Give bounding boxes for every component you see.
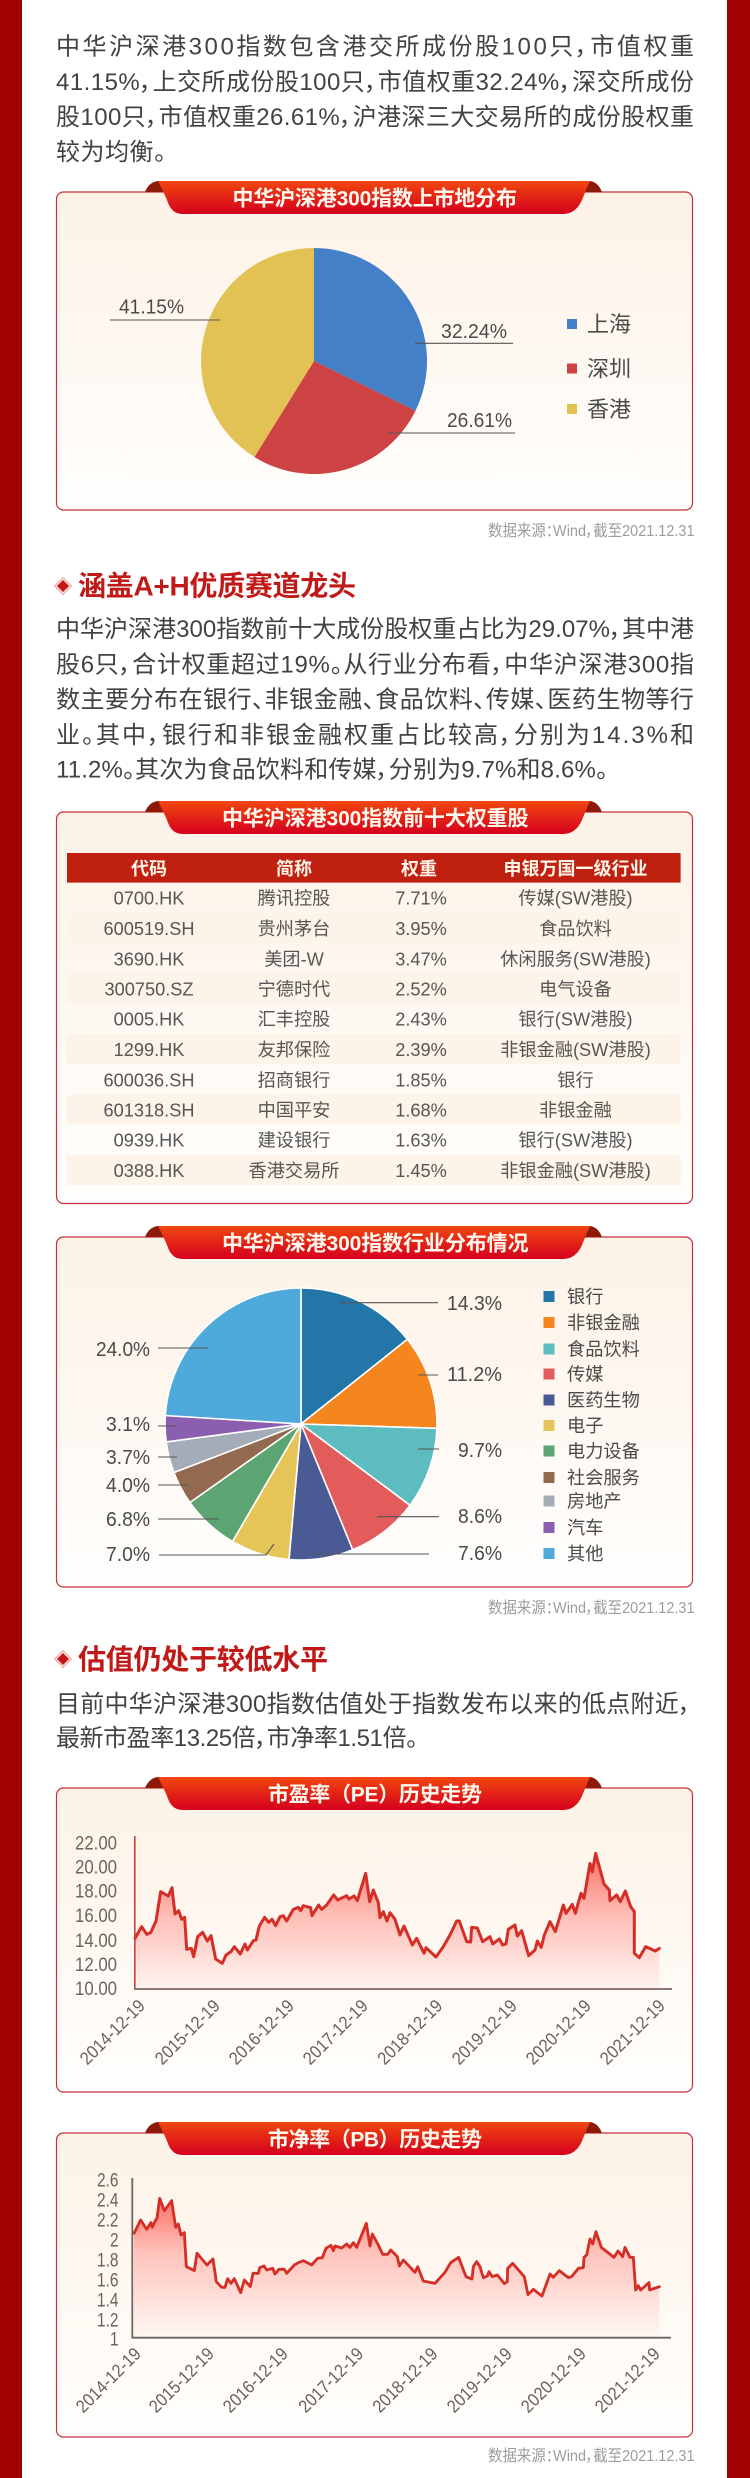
table: top ten constituents: 食品饮料 bbox=[539, 919, 612, 939]
line chart: PE: 12.00 bbox=[75, 1955, 117, 1976]
pie chart: listing venue: 41.15% bbox=[119, 296, 184, 318]
table: top ten constituents bbox=[67, 853, 681, 1185]
pie chart: listing venue: 32.24% bbox=[441, 321, 507, 343]
line chart: PB bbox=[72, 2170, 671, 2417]
table: top ten constituents: 非银金融(SW港股) bbox=[500, 1161, 651, 1181]
ribbon title: PB: 市净率（PB）历史走势 bbox=[268, 2128, 482, 2152]
line chart: PB: 2015-12-19 bbox=[145, 2344, 218, 2417]
table: top ten constituents: 1.63% bbox=[395, 1130, 447, 1150]
ribbon title: sector distribution: 中华沪深港300指数行业分布情况 bbox=[222, 1232, 528, 1256]
line chart: PB: 2.2 bbox=[97, 2210, 118, 2232]
data source note 3: 数据来源：Wind，截至2021.12.31 bbox=[488, 2447, 695, 2465]
table: top ten constituents: 权重 bbox=[401, 859, 437, 879]
legend: sectors: 传媒 bbox=[567, 1364, 603, 1384]
table: top ten constituents: 申银万国一级行业 bbox=[504, 858, 648, 879]
table: top ten constituents: 贵州茅台 bbox=[258, 919, 330, 939]
paragraph: top ten weights and sectors: 业。其中，银行和非银金融权重占比较高，分别为14.3%和 bbox=[56, 722, 694, 749]
line chart: PE: 2021-12-19 bbox=[596, 1996, 669, 2069]
pie chart: sector distribution: 14.3% bbox=[447, 1293, 502, 1315]
table: top ten constituents: 1.68% bbox=[395, 1100, 447, 1120]
table: top ten constituents: 2.52% bbox=[395, 980, 447, 1000]
table: top ten constituents: 银行(SW港股) bbox=[518, 1010, 633, 1030]
legend: sectors bbox=[544, 1287, 640, 1564]
table: top ten constituents: 600036.SH bbox=[103, 1070, 195, 1090]
table: top ten constituents: 0939.HK bbox=[114, 1130, 184, 1150]
legend: sectors: 医药生物 bbox=[567, 1390, 640, 1410]
pie chart: sector distribution: 24.0% bbox=[96, 1339, 150, 1361]
pie chart: listing venue bbox=[110, 248, 515, 474]
line chart: PB: 2019-12-19 bbox=[443, 2344, 516, 2417]
heading: valuation: 估值仍处于较低水平 bbox=[78, 1644, 328, 1675]
ribbon title: top ten bbox=[145, 801, 602, 834]
table: top ten constituents: 非银金融 bbox=[539, 1100, 612, 1120]
table: top ten constituents: 香港交易所 bbox=[249, 1161, 339, 1181]
panel: sector distribution bbox=[56, 1226, 692, 1587]
table: top ten constituents: 0700.HK bbox=[114, 888, 184, 908]
paragraph: top ten weights and sectors: 中华沪深港300指数前十大成份股权重占比为29.07%，其中港 bbox=[56, 616, 694, 643]
pie chart: sector distribution: 7.0% bbox=[106, 1544, 150, 1566]
line chart: PB: 1.2 bbox=[97, 2310, 118, 2332]
table: top ten constituents: 美团-W bbox=[264, 950, 325, 970]
line chart: PE: 16.00 bbox=[75, 1906, 117, 1927]
paragraph: valuation: 最新市盈率13.25倍，市净率1.51倍。 bbox=[56, 1725, 418, 1752]
line chart: PB: 2017-12-19 bbox=[294, 2344, 367, 2417]
table: top ten constituents: 1299.HK bbox=[114, 1040, 184, 1060]
table: top ten constituents: 休闲服务(SW港股) bbox=[500, 950, 651, 970]
line chart: PE: 20.00 bbox=[75, 1858, 117, 1878]
paragraph: top ten weights and sectors: 股6只，合计权重超过19%。从行业分布看，中华沪深港300指 bbox=[56, 652, 694, 679]
line chart: PE: 2018-12-19 bbox=[373, 1996, 446, 2069]
table: top ten constituents: 非银金融(SW港股) bbox=[500, 1040, 651, 1060]
intro paragraph: 股100只，市值权重26.61%，沪港深三大交易所的成份股权重 bbox=[56, 104, 694, 131]
table: top ten constituents: 0388.HK bbox=[114, 1161, 184, 1181]
table: top ten constituents: 2.43% bbox=[395, 1010, 447, 1030]
line chart: PE: 2015-12-19 bbox=[151, 1996, 224, 2069]
table: top ten constituents: 友邦保险 bbox=[258, 1040, 330, 1060]
ribbon title: PB bbox=[145, 2122, 602, 2155]
line chart: PB: 2 bbox=[110, 2230, 119, 2252]
table: top ten constituents: 传媒(SW港股) bbox=[518, 888, 633, 908]
table: top ten constituents: 2.39% bbox=[395, 1040, 447, 1060]
table: top ten constituents: 0005.HK bbox=[114, 1010, 184, 1030]
pie chart: sector distribution: 9.7% bbox=[458, 1440, 502, 1462]
right red side band bbox=[727, 0, 750, 2478]
legend: listing venue bbox=[567, 312, 631, 422]
legend: listing venue: 深圳 bbox=[587, 356, 631, 382]
line chart: PB: 1 bbox=[110, 2330, 119, 2350]
ribbon title: listing venue: 中华沪深港300指数上市地分布 bbox=[232, 186, 517, 210]
line chart: PB: 2.6 bbox=[97, 2170, 118, 2192]
left red side band bbox=[0, 0, 22, 2478]
line chart: PE: 2016-12-19 bbox=[225, 1996, 298, 2069]
legend: sectors: 非银金融 bbox=[567, 1313, 640, 1333]
line chart: PE: 18.00 bbox=[75, 1882, 117, 1902]
line chart: PB: 2018-12-19 bbox=[369, 2344, 441, 2417]
line chart: PE: 14.00 bbox=[75, 1931, 117, 1952]
table: top ten constituents: 3.47% bbox=[395, 950, 447, 970]
intro paragraph: 较为均衡。 bbox=[56, 139, 166, 166]
line chart: PB: 1.6 bbox=[97, 2270, 118, 2292]
table: top ten constituents: 1.85% bbox=[395, 1070, 447, 1090]
legend: sectors: 电子 bbox=[567, 1416, 603, 1436]
pie chart: sector distribution: 7.6% bbox=[458, 1543, 502, 1565]
panel: PB history bbox=[56, 2122, 692, 2437]
paragraph: top ten weights and sectors: 11.2%。其次为食品饮料和传媒，分别为9.7%和8.6%。 bbox=[56, 756, 608, 784]
legend: listing venue: 上海 bbox=[587, 312, 631, 337]
ribbon title: PE: 市盈率（PE）历史走势 bbox=[268, 1782, 482, 1806]
table: top ten constituents: 3690.HK bbox=[114, 950, 184, 970]
intro paragraph bbox=[56, 34, 694, 166]
pie chart: sector distribution: 11.2% bbox=[447, 1364, 502, 1386]
line chart: PE bbox=[75, 1834, 672, 2069]
pie chart: listing venue: 26.61% bbox=[447, 410, 512, 432]
line chart: PB: 1.4 bbox=[97, 2290, 119, 2312]
table: top ten constituents: 7.71% bbox=[395, 888, 447, 908]
table: top ten constituents: 招商银行 bbox=[258, 1070, 330, 1090]
line chart: PB: 2016-12-19 bbox=[219, 2344, 292, 2417]
pie chart: sector distribution: 3.1% bbox=[106, 1414, 150, 1436]
intro paragraph: 41.15%，上交所成份股100只，市值权重32.24%，深交所成份 bbox=[56, 69, 694, 96]
legend: sectors: 其他 bbox=[567, 1544, 603, 1564]
table: top ten constituents: 建设银行 bbox=[258, 1130, 330, 1150]
ribbon title: PE bbox=[145, 1777, 602, 1810]
legend: sectors: 房地产 bbox=[567, 1492, 622, 1512]
heading: A+H leaders: 涵盖A+H优质赛道龙头 bbox=[78, 570, 356, 602]
ribbon title: top ten: 中华沪深港300指数前十大权重股 bbox=[222, 808, 528, 830]
panel: PE history bbox=[56, 1777, 692, 2092]
data source note 1: 数据来源：Wind，截至2021.12.31 bbox=[488, 522, 695, 540]
table: top ten constituents: 银行 bbox=[557, 1070, 594, 1090]
table: top ten constituents: 1.45% bbox=[395, 1161, 447, 1181]
line chart: PB: 2014-12-19 bbox=[72, 2344, 145, 2417]
line chart: PE: 2014-12-19 bbox=[76, 1996, 149, 2069]
line chart: PE: 2020-12-19 bbox=[522, 1996, 595, 2069]
legend: sectors: 电力设备 bbox=[567, 1442, 640, 1462]
paragraph: valuation: 目前中华沪深港300指数估值处于指数发布以来的低点附近， bbox=[56, 1691, 691, 1718]
paragraph: top ten weights and sectors: 数主要分布在银行、非银金融、食品饮料、传媒、医药生物等行 bbox=[56, 687, 694, 714]
pie chart: sector distribution: 6.8% bbox=[106, 1509, 150, 1531]
data source note 2: 数据来源：Wind，截至2021.12.31 bbox=[488, 1599, 695, 1617]
pie chart: sector distribution: 8.6% bbox=[458, 1506, 502, 1528]
line chart: PE: 10.00 bbox=[75, 1979, 117, 2000]
ribbon title: sector distribution bbox=[145, 1226, 602, 1259]
panel: top ten constituents bbox=[56, 801, 692, 1204]
line chart: PB: 2.4 bbox=[97, 2190, 119, 2212]
pie chart: sector distribution: 3.7% bbox=[106, 1447, 150, 1469]
legend: sectors: 食品饮料 bbox=[567, 1340, 640, 1360]
pie chart: sector distribution bbox=[96, 1288, 502, 1566]
intro paragraph: 中华沪深港300指数包含港交所成份股100只，市值权重 bbox=[56, 34, 694, 60]
pie chart: sector distribution: 4.0% bbox=[106, 1475, 150, 1497]
paragraph: top ten weights and sectors bbox=[56, 616, 694, 784]
ribbon title: listing venue bbox=[145, 181, 602, 214]
table: top ten constituents: 腾讯控股 bbox=[258, 888, 330, 908]
table: top ten constituents: 代码 bbox=[131, 859, 167, 879]
table: top ten constituents: 300750.SZ bbox=[105, 980, 193, 1000]
line chart: PE: 2019-12-19 bbox=[448, 1996, 521, 2069]
line chart: PB: 2021-12-19 bbox=[591, 2344, 664, 2417]
line chart: PE: 22.00 bbox=[75, 1834, 117, 1854]
table: top ten constituents: 601318.SH bbox=[103, 1100, 195, 1120]
table: top ten constituents: 宁德时代 bbox=[258, 980, 330, 1000]
paragraph: valuation bbox=[56, 1691, 691, 1752]
legend: sectors: 银行 bbox=[567, 1287, 603, 1307]
legend: listing venue: 香港 bbox=[587, 397, 631, 422]
line chart: PE: 2017-12-19 bbox=[299, 1996, 372, 2069]
line chart: PB: 1.8 bbox=[97, 2250, 118, 2272]
table: top ten constituents: 汇丰控股 bbox=[258, 1010, 330, 1030]
legend: sectors: 汽车 bbox=[567, 1518, 603, 1538]
panel: listing venue distribution bbox=[56, 181, 692, 510]
table: top ten constituents: 3.95% bbox=[395, 919, 447, 939]
legend: sectors: 社会服务 bbox=[567, 1468, 640, 1488]
line chart: PB: 2020-12-19 bbox=[517, 2344, 590, 2417]
table: top ten constituents: 600519.SH bbox=[103, 919, 195, 939]
table: top ten constituents: 电气设备 bbox=[539, 980, 612, 1000]
table: top ten constituents: 银行(SW港股) bbox=[518, 1130, 633, 1150]
table: top ten constituents: 中国平安 bbox=[258, 1100, 330, 1120]
table: top ten constituents: 简称 bbox=[276, 858, 312, 879]
